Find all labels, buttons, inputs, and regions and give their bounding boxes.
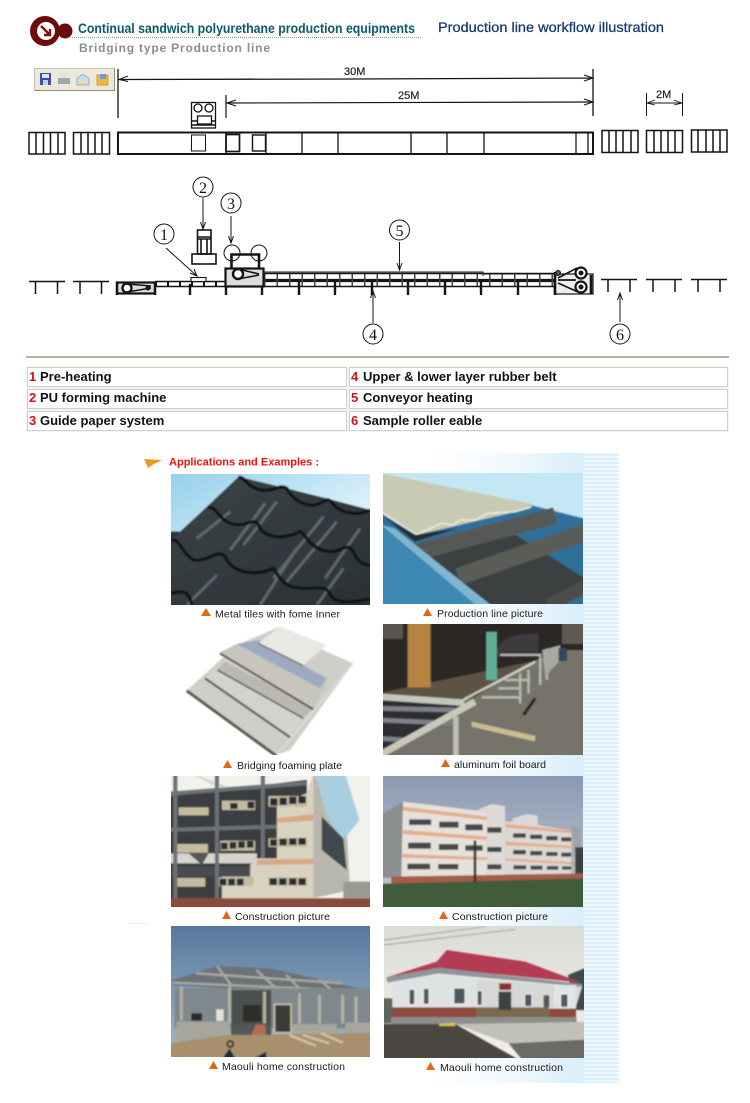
- photo: finished factory: [383, 776, 583, 907]
- caption: construction picture right: Construction picture: [452, 911, 548, 923]
- dimension 30M: [118, 66, 593, 118]
- caption: construction picture left: Construction picture: [235, 911, 330, 923]
- forming machine plan: [192, 102, 216, 128]
- subtitle: Bridging type Production line: [79, 41, 270, 55]
- photo: home frame: [171, 926, 370, 1057]
- legend item 1: Pre-heating: [40, 369, 112, 384]
- plan rollers right: [602, 130, 727, 152]
- right roller tables: [601, 280, 727, 292]
- callout 2: 2: [199, 180, 207, 197]
- dimension 25M: [226, 90, 593, 118]
- caption: foaming plate: Bridging foaming plate: [237, 760, 342, 772]
- dimension 30M: 30M: [344, 66, 365, 78]
- caption: production line: Production line picture: [437, 608, 543, 620]
- legend table: [26, 366, 729, 432]
- main conveyor plan: [118, 132, 593, 154]
- pre-heater plate: [191, 278, 206, 282]
- legend item 5: 5: [351, 390, 358, 405]
- photo: production line: [383, 473, 583, 604]
- caption: finished home: Maouli home construction: [440, 1062, 563, 1074]
- caption: home frame: Maouli home construction: [222, 1061, 345, 1073]
- legend item 6: Sample roller eable: [363, 413, 482, 428]
- conveyor beam: [155, 272, 555, 286]
- callout 3: [221, 193, 241, 243]
- photo: aluminum foil board line: [383, 624, 583, 755]
- callout 1: 1: [160, 227, 168, 244]
- callout 5: [390, 220, 410, 270]
- legend item 5: Conveyor heating: [363, 390, 473, 405]
- legend item 3: Guide paper system: [40, 413, 164, 428]
- plan rollers left: [29, 132, 110, 154]
- dimension 2M: 2M: [656, 89, 671, 101]
- legend item 6: 6: [351, 413, 358, 428]
- plan view diagram: [29, 66, 727, 154]
- callout 2: [193, 177, 213, 229]
- legend item 3: 3: [29, 413, 36, 428]
- caption: aluminum foil board: aluminum foil board: [454, 759, 546, 771]
- photo: foaming plates: [185, 626, 354, 755]
- discharge drive unit: [555, 268, 593, 295]
- conveyor legs: [190, 282, 555, 295]
- callout 6: 6: [616, 327, 624, 344]
- dimension 2M: [646, 89, 682, 116]
- callout 4: 4: [369, 327, 377, 344]
- striped blue background: [430, 453, 619, 1083]
- side view diagram: [29, 177, 727, 344]
- legend item 1: 1: [29, 369, 36, 384]
- photo: construction frame: [171, 776, 370, 907]
- left roller tables: [29, 282, 109, 294]
- icon: orange wedge: [144, 459, 162, 468]
- callout 1: [154, 224, 197, 276]
- toolbar icons: [34, 68, 114, 90]
- PU forming machine: [192, 230, 216, 264]
- icon: mail: [77, 74, 89, 85]
- pre-heating drive unit: [117, 282, 155, 295]
- callout 4: [363, 291, 383, 344]
- icon: print: [58, 74, 70, 84]
- guide paper system: [224, 245, 267, 286]
- dimension 25M: 25M: [398, 90, 419, 102]
- logo icon: [30, 16, 72, 46]
- applications heading: Applications and Examples :: [169, 456, 319, 468]
- caption: metal tiles: Metal tiles with fome Inner: [215, 608, 340, 620]
- photo: metal tiles: [171, 474, 370, 605]
- callout 3: 3: [227, 196, 235, 213]
- legend item 2: PU forming machine: [40, 390, 166, 405]
- callout 6: [610, 293, 630, 344]
- photo: finished home: [384, 926, 584, 1058]
- legend item 2: 2: [29, 390, 36, 405]
- section heading: Production line workflow illustration: [438, 19, 664, 35]
- legend item 4: 4: [351, 369, 359, 384]
- callout 5: 5: [396, 223, 404, 240]
- icon: save: [40, 73, 51, 85]
- title: Continual sandwich polyurethane production equipments: [78, 20, 415, 36]
- legend item 4: Upper & lower layer rubber belt: [363, 369, 557, 384]
- icon: folder: [97, 74, 108, 85]
